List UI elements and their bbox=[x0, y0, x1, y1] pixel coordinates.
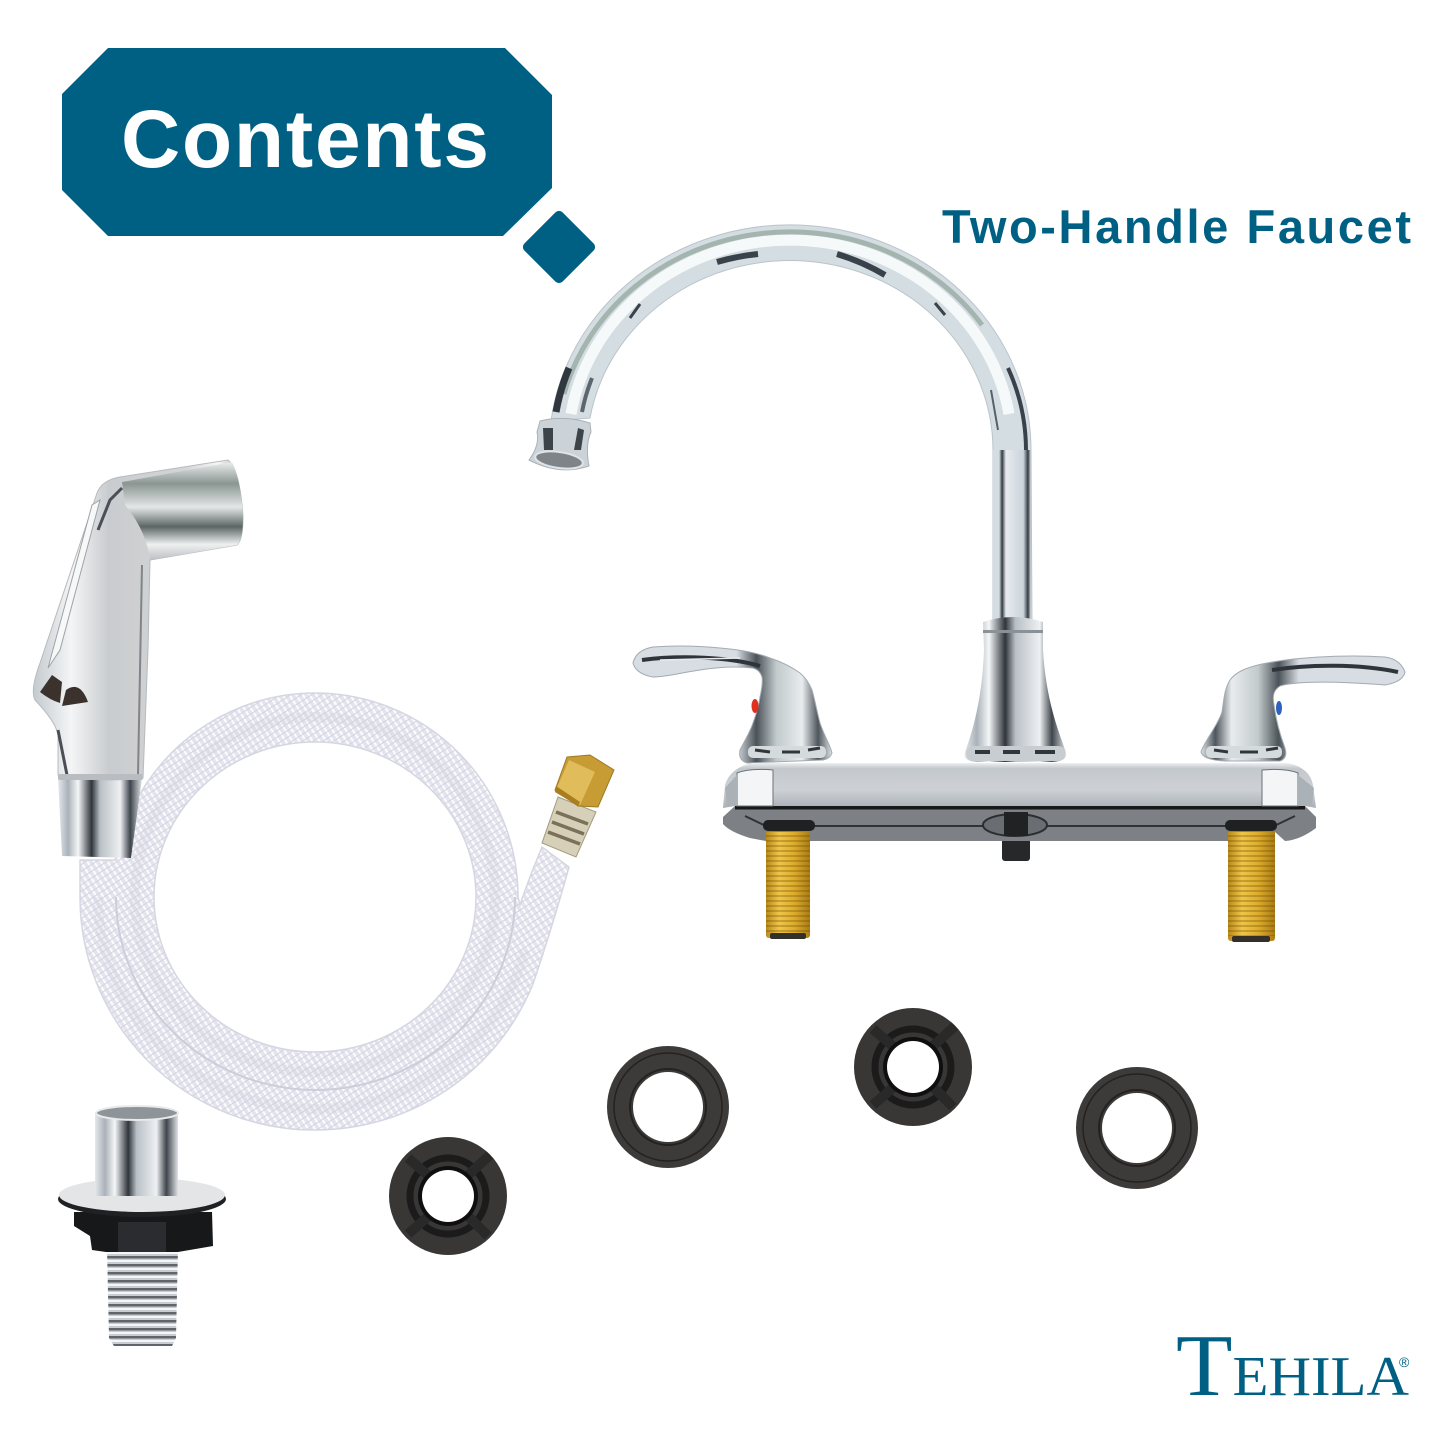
braided hose bbox=[80, 693, 569, 1130]
registered mark: ® bbox=[1399, 1354, 1410, 1370]
title badge: Contents bbox=[62, 48, 552, 236]
soft hose shading bbox=[98, 717, 525, 1109]
center pedestal bbox=[965, 617, 1066, 762]
flange bbox=[58, 1181, 226, 1217]
rubber washer left bbox=[607, 1046, 729, 1168]
black nut base bbox=[74, 1212, 213, 1252]
aerator bbox=[529, 418, 591, 471]
rubber washer right bbox=[1076, 1067, 1198, 1189]
title text: Contents bbox=[121, 94, 489, 185]
brand logo: Tehila: TEHILA bbox=[1176, 1318, 1410, 1415]
spout bbox=[551, 225, 1032, 622]
deck plate bbox=[723, 763, 1316, 841]
threaded shank bbox=[107, 1248, 178, 1346]
sprayer head highlight bbox=[122, 462, 243, 560]
heading: Two-Handle Faucet: Two-Handle Faucet bbox=[942, 200, 1411, 253]
nut bottom-left bbox=[389, 1137, 507, 1255]
mounting fitting bbox=[58, 1106, 226, 1346]
left handle bbox=[633, 646, 832, 763]
cup bbox=[95, 1112, 178, 1196]
hose loop bbox=[80, 693, 569, 1130]
sprayer body bbox=[33, 460, 243, 780]
side sprayer bbox=[33, 460, 243, 858]
nut top-right bbox=[854, 1008, 972, 1126]
hose brass connector bbox=[542, 755, 614, 857]
right handle bbox=[1201, 656, 1405, 761]
strand separation bbox=[116, 897, 515, 1090]
sprayer collar bbox=[58, 778, 142, 858]
badge diamond accent bbox=[521, 209, 597, 285]
faucet illustration bbox=[529, 225, 1405, 942]
badge shape bbox=[62, 48, 552, 236]
black center bolt bbox=[1002, 815, 1030, 861]
sprayer trigger shadow bbox=[40, 675, 88, 706]
threaded brass stems bbox=[766, 826, 1275, 942]
